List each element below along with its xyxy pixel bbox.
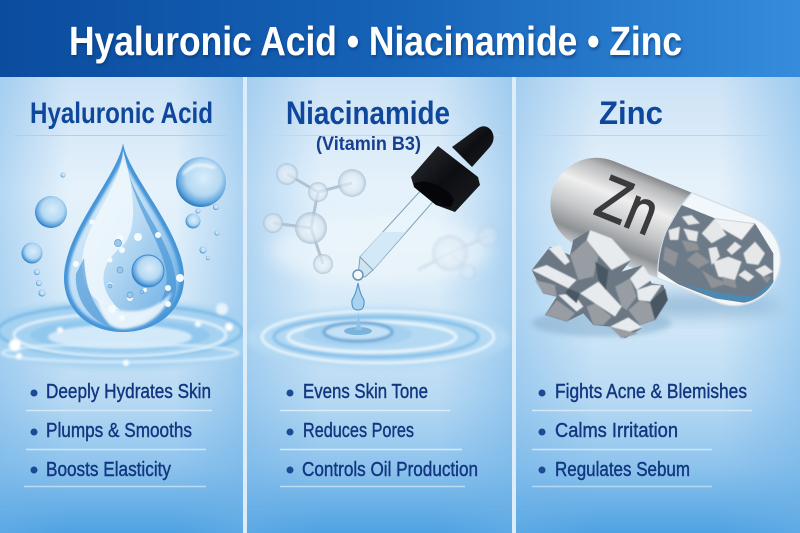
benefit list: niacinamide: Evens Skin Tone xyxy=(303,381,428,403)
dropper cap xyxy=(411,146,480,212)
dropper glass tube xyxy=(360,188,437,270)
icon: water drop xyxy=(64,143,184,332)
benefit list: zinc xyxy=(532,381,752,486)
panel: hyaluronic acid xyxy=(0,77,270,533)
benefit list: hyaluronic acid xyxy=(24,381,212,486)
benefit list: niacinamide xyxy=(280,381,478,486)
heading: hyaluronic acid: Hyaluronic Acid xyxy=(30,97,213,130)
header banner xyxy=(0,0,800,77)
icon: dropper xyxy=(352,126,494,310)
benefit list: hyaluronic acid: Plumps & Smooths xyxy=(46,420,192,442)
benefit list: zinc: Fights Acne & Blemishes xyxy=(555,381,747,403)
capsule zinc fragments xyxy=(657,205,773,303)
icon: zinc rock cluster xyxy=(532,230,672,338)
benefit list: hyaluronic acid: Boosts Elasticity xyxy=(46,459,171,481)
icon: zinc capsule xyxy=(550,158,782,306)
benefit list: zinc: Calms Irritation xyxy=(555,420,678,442)
panel: niacinamide xyxy=(243,77,516,533)
benefit list: zinc: Regulates Sebum xyxy=(555,459,690,481)
capsule label: Zn: Zn xyxy=(587,162,668,249)
water ripples xyxy=(0,301,270,369)
dropper rubber bulb xyxy=(452,126,494,167)
benefit list: niacinamide: Controls Oil Production xyxy=(302,459,478,481)
heading: zinc: Zinc xyxy=(599,95,663,131)
water ripples xyxy=(246,308,510,368)
benefit list: hyaluronic acid: Deeply Hydrates Skin xyxy=(46,381,211,403)
heading: niacinamide: Niacinamide xyxy=(286,95,450,131)
benefit list: niacinamide: Reduces Pores xyxy=(303,420,414,442)
icon: bubbles xyxy=(22,157,226,296)
main title: Hyaluronic Acid • Niacinamide • Zinc xyxy=(69,18,682,64)
molecule illustration xyxy=(263,163,499,280)
subheading: vitamin b3: (Vitamin B3) xyxy=(316,134,421,155)
falling drop xyxy=(352,283,364,310)
capsule shadow xyxy=(600,293,780,317)
panel: zinc xyxy=(512,77,800,533)
